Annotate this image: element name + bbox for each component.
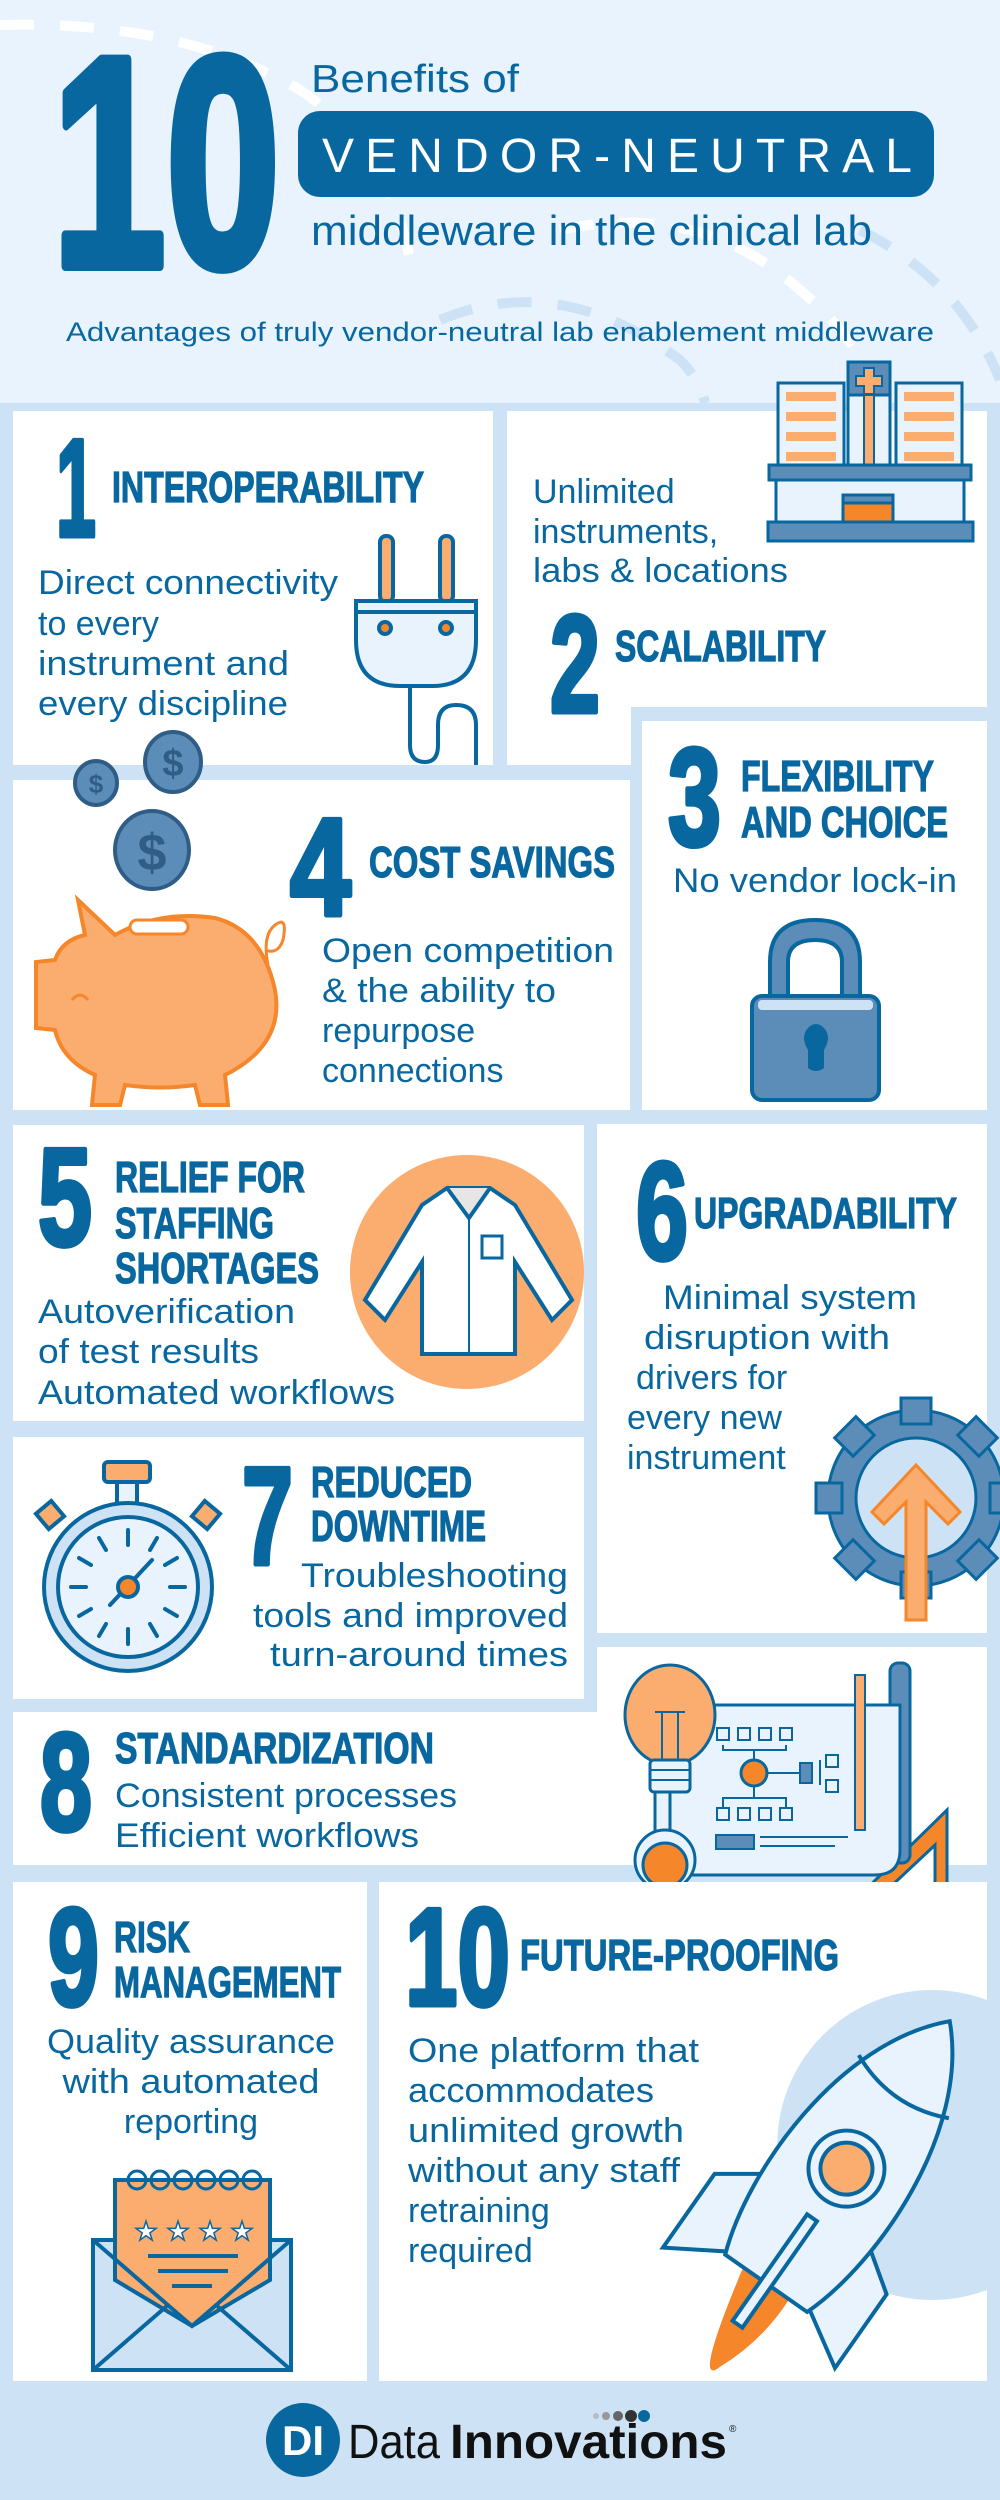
icon: envelope with rating note xyxy=(93,2171,291,2370)
panel 1: interoperability: every discipline xyxy=(38,685,288,723)
icon: envelope with rating note: ★ xyxy=(134,2217,158,2247)
panel 1: interoperability: Direct connectivity xyxy=(38,564,338,602)
panel 7: reduced downtime: DOWNTIME xyxy=(311,1502,486,1551)
panel 4: cost savings: & the ability to xyxy=(322,972,556,1010)
footer logo: Data Innovations: Innovations xyxy=(450,2416,727,2469)
icon: padlock xyxy=(752,920,879,1100)
panel 8: standardization: 8 xyxy=(40,1705,92,1860)
panel 1: interoperability: instrument and xyxy=(38,645,289,683)
footer logo: Data Innovations xyxy=(266,2403,737,2477)
icon: piggy bank xyxy=(36,900,284,1105)
subtitle: Advantages of truly vendor-neutral lab enablement middleware xyxy=(66,317,934,347)
title: middleware in the clinical lab: middleware in the clinical lab xyxy=(311,207,872,254)
panel 5: relief for staffing shortages: STAFFING xyxy=(115,1199,274,1248)
footer logo: Data Innovations: ® xyxy=(729,2424,737,2435)
icon: lab coat xyxy=(350,1155,584,1389)
panel 6: upgradability: 6 xyxy=(636,1134,688,1289)
panel 10: future-proofing: unlimited growth xyxy=(408,2112,684,2150)
panel 9: risk management: reporting xyxy=(124,2103,258,2141)
panel 3: flexibility and choice: FLEXIBILITY xyxy=(741,752,934,801)
panel 7: reduced downtime: turn-around times xyxy=(270,1636,568,1674)
panel 5: relief for staffing shortages: RELIEF FOR xyxy=(115,1153,305,1202)
panel 2: scalability: 2 xyxy=(550,587,600,742)
panel 5: relief for staffing shortages: 5 xyxy=(38,1120,92,1275)
panel 6: upgradability xyxy=(597,1124,1000,1633)
panel 10: future-proofing: FUTURE-PROOFING xyxy=(520,1931,839,1980)
title pill: VENDOR-NEUTRAL xyxy=(298,111,934,197)
panel 7: reduced downtime: tools and improved xyxy=(253,1597,568,1635)
icon: envelope with rating note: ★ xyxy=(198,2217,222,2247)
panel 3: flexibility and choice: No vendor lock-in xyxy=(673,862,957,900)
panel 1: interoperability: INTEROPERABILITY xyxy=(112,463,424,512)
panel 5: relief for staffing shortages: of test results xyxy=(38,1333,259,1371)
icon: coins: $ xyxy=(138,824,167,882)
icon: rocket xyxy=(621,1961,1000,2427)
panel 10: future-proofing: accommodates xyxy=(408,2072,654,2110)
icon: envelope with rating note: ★ xyxy=(166,2217,190,2247)
icon: gear with arrow xyxy=(816,1398,1000,1620)
panel 6: upgradability: disruption with xyxy=(644,1319,890,1357)
panel 4: cost savings xyxy=(13,732,630,1110)
icon: plug xyxy=(356,536,476,765)
panel 3: flexibility and choice xyxy=(631,707,1000,1125)
icon: coins: $ xyxy=(89,769,104,799)
panel 6: upgradability: Minimal system xyxy=(663,1279,917,1317)
panel 7: reduced downtime: Troubleshooting xyxy=(301,1557,568,1595)
panel 9: risk management xyxy=(13,1880,367,2381)
panel 2: scalability: labs & locations xyxy=(533,552,788,590)
icon: envelope with rating note: ★ xyxy=(230,2217,254,2247)
title pill: VENDOR-NEUTRAL: VENDOR-NEUTRAL xyxy=(322,130,912,183)
panel 4: cost savings: Open competition xyxy=(322,932,614,970)
footer logo: Data Innovations: DI xyxy=(282,2417,324,2464)
panel 2: scalability: Unlimited xyxy=(533,473,675,511)
title: big number 10: 10 xyxy=(52,0,280,330)
panel 10: future-proofing: required xyxy=(408,2232,533,2270)
panel 2: scalability: instruments, xyxy=(533,513,718,551)
icon: stopwatch xyxy=(36,1462,220,1671)
panel 5: relief for staffing shortages: SHORTAGES xyxy=(115,1244,319,1293)
panel 10: future-proofing: 10 xyxy=(405,1880,510,2035)
panel 2: scalability xyxy=(507,362,1000,765)
panel 3: flexibility and choice: 3 xyxy=(668,720,721,875)
icon: coins xyxy=(75,732,201,889)
panel 4: cost savings: 4 xyxy=(290,790,351,945)
panel 9: risk management: Quality assurance xyxy=(47,2023,335,2061)
panel 7: reduced downtime xyxy=(13,1437,584,1699)
panel 8: standardization: STANDARDIZATION xyxy=(115,1724,434,1773)
panel 9: risk management: 9 xyxy=(48,1880,99,2035)
panel 7: reduced downtime: REDUCED xyxy=(311,1458,472,1507)
panel 1: interoperability: 1 xyxy=(56,411,96,566)
panel 7: reduced downtime: 7 xyxy=(242,1439,293,1594)
panel 1: interoperability: to every xyxy=(38,605,159,643)
panel 6: upgradability: instrument xyxy=(627,1439,786,1477)
panel 2: scalability: SCALABILITY xyxy=(615,622,826,671)
panel 10: future-proofing: retraining xyxy=(408,2192,550,2230)
panel 8: standardization: Efficient workflows xyxy=(115,1817,419,1855)
panel 5: relief for staffing shortages: Automated workflows xyxy=(38,1374,395,1412)
panel 5: relief for staffing shortages xyxy=(13,1120,584,1421)
icon: coins: $ xyxy=(162,743,184,785)
panel 6: upgradability: every new xyxy=(627,1399,782,1437)
panel 8: standardization: Consistent processes xyxy=(115,1777,457,1815)
panel 6: upgradability: drivers for xyxy=(636,1359,787,1397)
icon: hospital building xyxy=(768,362,973,541)
panel 10: future-proofing: One platform that xyxy=(408,2032,700,2070)
panel 4: cost savings: repurpose xyxy=(322,1012,475,1050)
panel 4: cost savings: COST SAVINGS xyxy=(369,838,615,887)
panel 1: interoperability xyxy=(13,411,493,765)
panel 9: risk management: MANAGEMENT xyxy=(114,1958,341,2007)
footer logo: Data Innovations: Data xyxy=(348,2416,440,2469)
panel 4: cost savings: connections xyxy=(322,1052,503,1090)
panel 5: relief for staffing shortages: Autoverification xyxy=(38,1293,295,1331)
panel 10: future-proofing xyxy=(379,1880,1000,2427)
panel 9: risk management: RISK xyxy=(114,1913,190,1962)
panel 10: future-proofing: without any staff xyxy=(407,2152,681,2190)
panel 9: risk management: with automated xyxy=(61,2063,319,2101)
panel 8: standardization xyxy=(13,1647,987,1905)
title: Benefits of: Benefits of xyxy=(311,58,519,101)
icon: blueprint with light bulb xyxy=(625,1663,947,1905)
